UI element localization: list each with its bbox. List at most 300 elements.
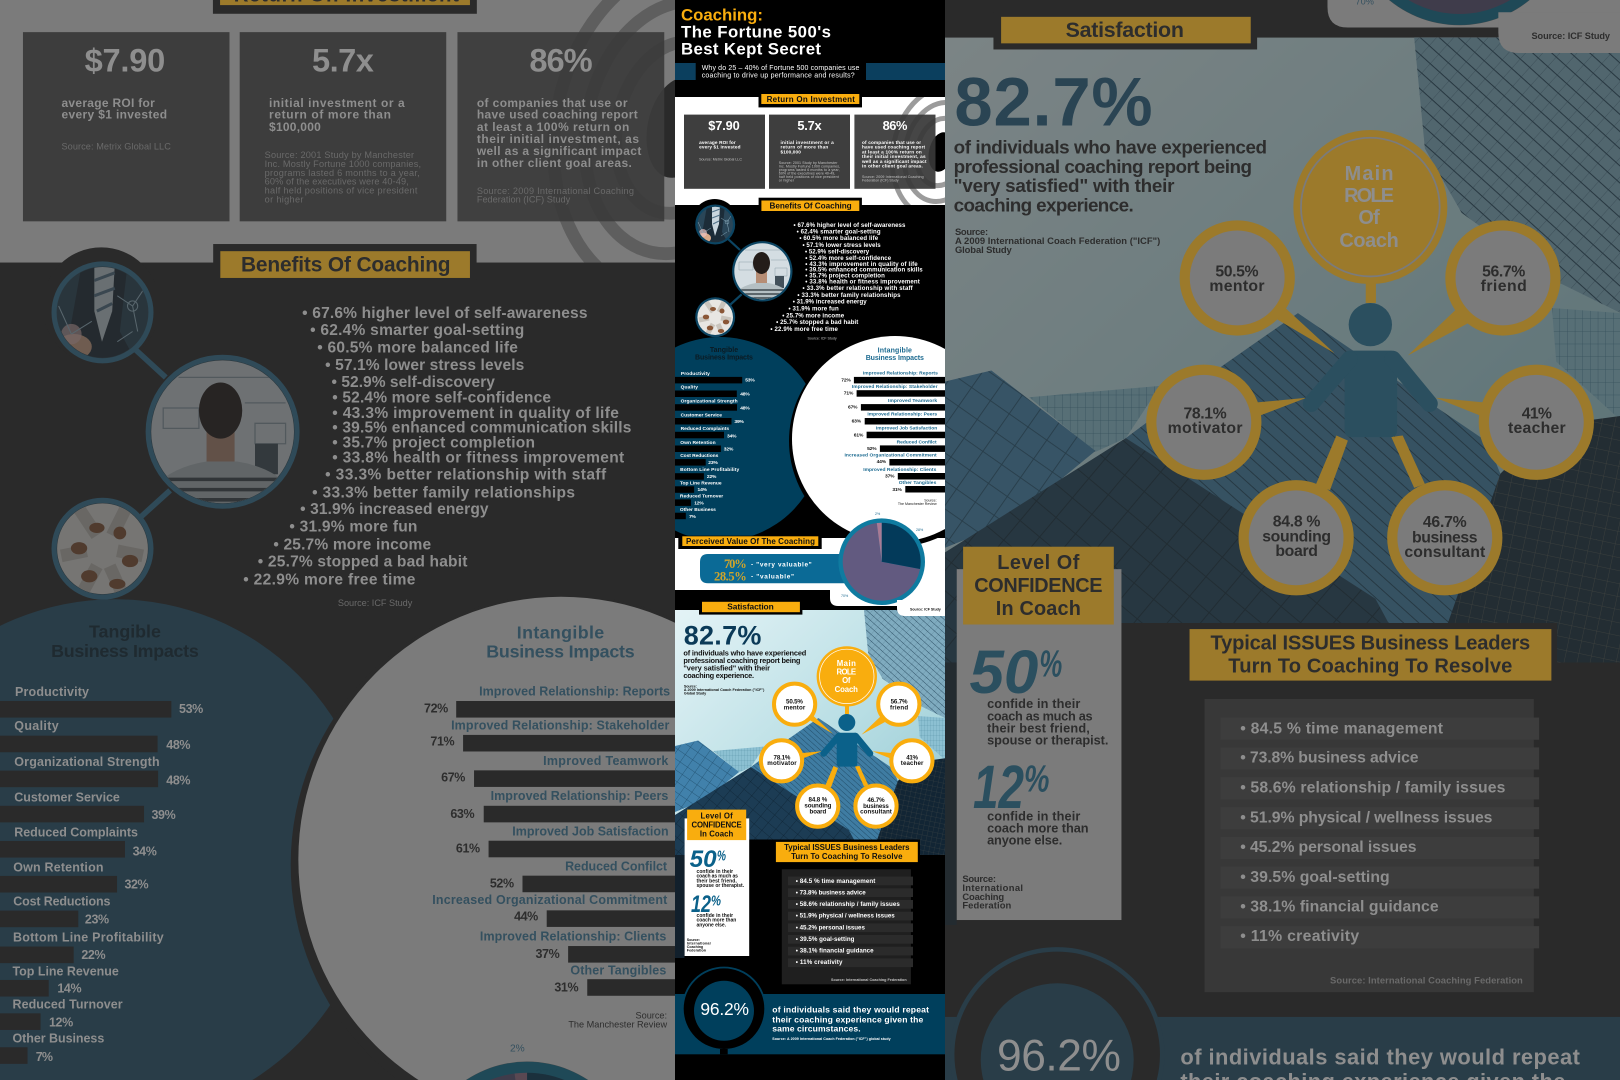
heading: Return On Investment bbox=[758, 94, 862, 107]
stat: 82.7% very satisfied: coaching experience. bbox=[683, 671, 754, 680]
panel: typical issues list: • 58.6% relationship / family issues bbox=[796, 901, 900, 908]
panel: intangible business impacts chart: Business Impacts bbox=[866, 355, 924, 362]
panel: intangible business impacts chart: 61% bbox=[456, 841, 480, 855]
banner: 96.2% would repeat bbox=[675, 968, 945, 1054]
panel: typical issues list: • 39.5% goal-setting bbox=[1240, 869, 1390, 886]
panel: intangible business impacts chart: Improved Relationship: Clients bbox=[480, 930, 666, 944]
panel: intangible business impacts chart: Other Tangibles bbox=[899, 480, 937, 486]
card: 5.7x investment: or higher bbox=[779, 178, 795, 182]
card: 86% of companies: 86% bbox=[529, 41, 593, 78]
list: coaching benefits: • 33.8% health or fitness improvement bbox=[805, 278, 920, 285]
panel: level of confidence in coach: % bbox=[1024, 757, 1050, 800]
panel: typical issues list: • 73.8% business advice bbox=[796, 889, 866, 896]
list: coaching benefits: • 31.9% increased energy bbox=[300, 501, 489, 518]
panel: tangible business impacts chart: Organizational Strength bbox=[681, 398, 738, 404]
panel: tangible business impacts chart: Customer Service bbox=[681, 412, 722, 418]
card: 5.7x investment: 5.7x bbox=[797, 118, 823, 133]
panel: tangible business impacts chart: 22% bbox=[81, 948, 106, 962]
card: $7.90 ROI: $7.90 bbox=[708, 118, 740, 133]
panel: left zoomed and dimmed view (ROI, benefits, business impacts) bbox=[0, 0, 675, 1080]
panel: level of confidence in coach: coach more than bbox=[987, 820, 1089, 835]
callout: valuable percentages: 28.5% bbox=[714, 569, 747, 583]
panel: intangible business impacts chart: 72% bbox=[424, 702, 448, 716]
panel: tangible business impacts chart: Productivity bbox=[681, 371, 710, 377]
panel: level of confidence in coach: CONFIDENCE bbox=[691, 820, 742, 829]
diagram: main role of coach: friend bbox=[890, 704, 908, 711]
list: coaching benefits: • 31.9% more fun bbox=[788, 305, 839, 312]
banner: 96.2% would repeat: their coaching experience given the bbox=[772, 1014, 924, 1024]
card: 86% of companies: have used coaching report bbox=[862, 144, 926, 150]
stat: 82.7% very satisfied: A 2009 International Coach Federation ("ICF") bbox=[955, 235, 1160, 246]
panel: intangible business impacts chart: 72% bbox=[841, 378, 851, 384]
panel: tangible business impacts chart: 23% bbox=[708, 460, 718, 466]
card: $7.90 ROI: every $1 invested bbox=[699, 144, 741, 150]
diagram: main role of coach: motivator bbox=[767, 760, 797, 767]
list: coaching benefits: Source: ICF Study bbox=[338, 598, 413, 608]
panel: intangible business impacts chart: Other Tangibles bbox=[570, 963, 666, 977]
list: coaching benefits: • 25.7% more income bbox=[273, 536, 432, 553]
panel: center full infographic bbox=[675, 6, 945, 1054]
heading: Benefits Of Coaching: Benefits Of Coaching bbox=[770, 201, 852, 210]
panel: typical issues list: • 11% creativity bbox=[1240, 928, 1359, 945]
chart: pie bottom bbox=[1349, 0, 1570, 25]
diagram: main role of coach: 50.5% bbox=[1215, 263, 1259, 280]
panel: level of confidence in coach: their best friend, bbox=[987, 720, 1090, 735]
list: coaching benefits: • 33.3% better relationship with staff bbox=[802, 285, 914, 292]
diagram: main role of coach bbox=[1151, 130, 1589, 590]
panel: intangible business impacts chart: Improved Relationship: Peers bbox=[491, 789, 668, 803]
diagram: main role of coach: ROLE bbox=[1344, 185, 1394, 207]
card: 5.7x investment: or higher bbox=[265, 194, 303, 204]
panel: level of confidence in coach: anyone else. bbox=[696, 922, 727, 928]
card: 5.7x investment: Source: 2001 Study by Manchester bbox=[779, 161, 838, 165]
panel: tangible business impacts chart: 22% bbox=[707, 474, 717, 480]
stat: 82.7% very satisfied: coaching experience. bbox=[954, 195, 1134, 216]
card: 86% of companies: well as a significant impact bbox=[476, 144, 641, 158]
list: coaching benefits: • 31.9% increased energy bbox=[793, 299, 867, 306]
panel: intangible business impacts chart: 37% bbox=[535, 947, 560, 961]
diagram: main role of coach: business bbox=[863, 803, 889, 810]
diagram: main role of coach: mentor bbox=[784, 704, 806, 711]
stat: 82.7% very satisfied bbox=[683, 620, 807, 696]
list: coaching benefits: • 67.6% higher level of self-awareness bbox=[794, 222, 906, 229]
panel: typical issues list: Source: International Coaching Federation bbox=[831, 978, 907, 982]
callout: valuable percentages bbox=[700, 554, 845, 583]
panel: typical issues list: Source: International Coaching Federation bbox=[1330, 975, 1523, 986]
panel: tangible business impacts chart: 7% bbox=[36, 1050, 53, 1064]
panel: intangible business impacts chart: Reduced Confilct bbox=[565, 859, 667, 873]
panel: tangible business impacts chart: Other Business bbox=[12, 1031, 104, 1045]
diagram: main role of coach: Of bbox=[1358, 207, 1380, 229]
panel: intangible business impacts chart: Improved Relationship: Stakeholder bbox=[451, 718, 670, 732]
card: 86% of companies: Source: 2009 International Coaching bbox=[862, 175, 924, 179]
diagram: main role of coach: sounding bbox=[804, 803, 832, 810]
card: 86% of companies: Source: 2009 International Coaching bbox=[477, 186, 634, 196]
panel: typical issues list: • 38.1% financial guidance bbox=[796, 948, 874, 955]
stat: 82.7% very satisfied: Source: bbox=[684, 684, 697, 688]
card: 86% of companies bbox=[457, 32, 664, 221]
panel: intangible business impacts chart: Business Impacts bbox=[486, 641, 635, 661]
diagram: main role of coach: 46.7% bbox=[867, 797, 885, 804]
diagram: main role of coach: Main bbox=[837, 659, 856, 668]
panel: intangible business impacts chart: Improved Relationship: Reports bbox=[863, 371, 938, 377]
panel: intangible business impacts chart: Improved Job Satisfaction bbox=[512, 824, 669, 838]
panel: level of confidence in coach: Source: bbox=[687, 938, 700, 942]
panel: tangible business impacts chart: Bottom Line Profitability bbox=[680, 467, 739, 473]
list: coaching benefits: • 39.5% enhanced communication skills bbox=[332, 419, 632, 436]
banner: 96.2% would repeat bbox=[932, 949, 1620, 1080]
stat: 82.7% very satisfied bbox=[954, 64, 1267, 255]
card: $7.90 ROI: Source: Metrix Global LLC bbox=[699, 158, 742, 162]
diagram: main role of coach: mentor bbox=[1209, 278, 1265, 295]
diagram: main role of coach: consultant bbox=[1404, 544, 1486, 561]
panel: tangible business impacts chart: Business Impacts bbox=[695, 355, 753, 362]
card: 5.7x investment: 5.7x bbox=[312, 41, 374, 78]
list: coaching benefits: • 52.9% self-discovery bbox=[805, 249, 870, 256]
heading: typical issues: Turn To Coaching To Resolve bbox=[791, 852, 903, 861]
panel: tangible business impacts chart: Own Retention bbox=[13, 861, 104, 875]
card: 86% of companies: well as a significant impact bbox=[861, 159, 927, 164]
panel: level of confidence in coach: International bbox=[962, 882, 1023, 893]
panel: tangible business impacts chart: Reduced Complaints bbox=[14, 825, 138, 839]
banner: 96.2% would repeat: of individuals said they would repeat bbox=[772, 1005, 929, 1015]
panel: level of confidence in coach: 12 bbox=[691, 891, 711, 918]
subtitle band bbox=[675, 63, 945, 80]
panel: intangible business impacts chart: 63% bbox=[852, 419, 862, 425]
panel: level of confidence in coach: Source: bbox=[962, 873, 996, 884]
heading: Satisfaction: Satisfaction bbox=[727, 602, 774, 612]
diagram: main role of coach: 46.7% bbox=[1423, 514, 1467, 531]
panel: intangible business impacts chart: 31% bbox=[554, 980, 579, 994]
panel: tangible business impacts chart: 39% bbox=[734, 419, 745, 425]
panel: intangible business impacts chart: Improved Relationship: Reports bbox=[479, 684, 670, 698]
card: 86% of companies: in other client goal areas. bbox=[477, 156, 632, 170]
panel: level of confidence in coach: 12 bbox=[973, 753, 1024, 821]
card: 5.7x investment bbox=[240, 32, 446, 221]
banner: 96.2% would repeat: Source: A 2009 International Coach Federation ("ICF") global study bbox=[772, 1037, 891, 1041]
panel: level of confidence in coach: In Coach bbox=[700, 829, 734, 838]
card: 5.7x investment: half held positions of vice president bbox=[265, 185, 418, 195]
card: 5.7x investment: Inc. Mostly Fortune 1000 companies, bbox=[779, 164, 840, 168]
panel: level of confidence in coach: CONFIDENCE bbox=[974, 575, 1102, 597]
panel: tangible business impacts chart: Other Business bbox=[680, 507, 716, 513]
diagram: main role of coach: sounding bbox=[1262, 529, 1331, 546]
stat: 82.7% very satisfied: Global Study bbox=[684, 692, 707, 696]
panel: tangible business impacts chart: Tangible bbox=[710, 347, 738, 354]
panel: intangible business impacts chart: 63% bbox=[450, 807, 475, 821]
panel: intangible business impacts chart: 37% bbox=[885, 474, 895, 480]
panel: tangible business impacts chart: Organizational Strength bbox=[14, 755, 160, 769]
panel: tangible business impacts chart: 14% bbox=[698, 487, 708, 493]
list: coaching benefits: • 60.5% more balanced life bbox=[799, 235, 879, 242]
list: coaching benefits bbox=[243, 305, 632, 608]
subtitle band: Why do 25 – 40% of Fortune 500 companies use bbox=[702, 65, 859, 72]
panel: tangible business impacts chart: Business Impacts bbox=[51, 641, 199, 661]
stat: 82.7% very satisfied: "very satisfied" with their bbox=[683, 664, 770, 672]
panel: intangible business impacts chart: The Manchester Review bbox=[568, 1019, 667, 1029]
card: 5.7x investment: initial investment or a bbox=[269, 96, 405, 110]
heading: typical issues: Typical ISSUES Business Leaders bbox=[784, 843, 910, 852]
panel: level of confidence in coach: 50 bbox=[690, 846, 717, 873]
card: 5.7x investment: 60% of the executives were 40-49, bbox=[265, 177, 409, 187]
list: coaching benefits: • 33.3% better family relationships bbox=[797, 292, 901, 299]
list: coaching benefits: • 25.7% stopped a bad habit bbox=[258, 554, 467, 571]
panel: intangible business impacts chart: Intangible bbox=[517, 622, 604, 642]
banner: 96.2% would repeat: 96.2% bbox=[997, 1031, 1121, 1080]
chart: perceived value pie: 2% bbox=[875, 512, 881, 516]
panel: intangible business impacts chart: 31% bbox=[892, 487, 903, 493]
panel: tangible business impacts chart: Bottom Line Profitability bbox=[13, 930, 164, 944]
chart: pie top: 2% bbox=[510, 1043, 525, 1054]
card: 86% of companies: at least a 100% return on bbox=[477, 120, 629, 134]
diagram: main role of coach: friend bbox=[1481, 278, 1527, 295]
panel: level of confidence in coach: confide in their bbox=[987, 808, 1080, 823]
panel: typical issues list: • 39.5% goal-setting bbox=[796, 936, 855, 943]
heading: Satisfaction: Satisfaction bbox=[1066, 18, 1184, 42]
panel: intangible business impacts chart: Improved Teamwork bbox=[543, 754, 668, 768]
stat: 82.7% very satisfied: "very satisfied" with their bbox=[954, 175, 1175, 196]
panel: tangible business impacts chart: Reduced Turnover bbox=[12, 997, 123, 1011]
source tab: ICF study: Source: ICF Study bbox=[1531, 31, 1611, 41]
panel: intangible business impacts chart: Intangible bbox=[878, 347, 912, 354]
panel: tangible business impacts chart: 32% bbox=[124, 878, 149, 892]
card: 5.7x investment: return of more than bbox=[780, 144, 828, 150]
panel: intangible business impacts chart: 44% bbox=[877, 459, 887, 465]
panel: intangible business impacts chart: 52% bbox=[490, 876, 514, 890]
panel: typical issues list: • 51.9% physical / wellness issues bbox=[796, 913, 895, 920]
panel: tangible business impacts chart: 53% bbox=[745, 378, 755, 384]
panel: tangible business impacts chart: 14% bbox=[57, 981, 82, 995]
diagram: main role of coach: Main bbox=[1345, 163, 1394, 185]
list: coaching benefits: • 33.8% health or fitness improvement bbox=[332, 449, 624, 466]
panel: level of confidence in coach: % bbox=[717, 848, 726, 864]
panel: level of confidence in coach: Federation bbox=[962, 899, 1012, 910]
panel: intangible business impacts chart: Improved Teamwork bbox=[888, 398, 937, 404]
panel: level of confidence in coach: confide in their bbox=[696, 869, 733, 875]
card: 86% of companies: Federation (ICF) Study bbox=[477, 194, 571, 204]
list: coaching benefits: • 25.7% more income bbox=[782, 312, 845, 319]
stat: 82.7% very satisfied: 82.7% bbox=[954, 64, 1153, 141]
panel: tangible business impacts chart: Quality bbox=[14, 719, 59, 733]
card: 5.7x investment: programs lasted 6 months to a year, bbox=[265, 168, 420, 178]
diagram: main role of coach: teacher bbox=[1508, 420, 1566, 437]
panel: tangible business impacts chart: 48% bbox=[166, 738, 190, 752]
card: 5.7x investment: initial investment or a bbox=[780, 140, 834, 145]
source tab: ICF study: Source: ICF Study bbox=[910, 608, 941, 612]
card: 86% of companies: their initial investment, as bbox=[477, 132, 639, 146]
panel: tangible business impacts chart: 12% bbox=[49, 1015, 73, 1029]
panel: typical issues list: • 84.5 % time management bbox=[1240, 720, 1444, 737]
list: coaching benefits: • 22.9% more free time bbox=[770, 326, 839, 333]
diagram: main role of coach: teacher bbox=[901, 760, 924, 767]
callout: valuable percentages: - "very valuable" bbox=[751, 562, 812, 569]
panel: tangible business impacts chart: 53% bbox=[179, 702, 203, 716]
diagram: main role of coach: Of bbox=[842, 676, 851, 685]
heading: typical issues: Typical ISSUES Business Leaders bbox=[1210, 633, 1530, 655]
card: $7.90 ROI bbox=[23, 32, 229, 221]
panel: level of confidence in coach: coach as much as bbox=[696, 874, 738, 880]
panel: tangible business impacts chart: Cost Reductions bbox=[680, 453, 719, 459]
diagram: main role of coach: 78.1% bbox=[1184, 406, 1227, 423]
list: coaching benefits: • 62.4% smarter goal-setting bbox=[797, 228, 881, 235]
panel: level of confidence in coach: spouse or therapist. bbox=[696, 883, 745, 889]
card: 5.7x investment: $100,000 bbox=[780, 149, 801, 154]
panel: typical issues list bbox=[782, 869, 913, 984]
list: coaching benefits: • 52.4% more self-confidence bbox=[805, 255, 892, 262]
panel: tangible business impacts chart: Quality bbox=[681, 384, 698, 390]
diagram: main role of coach: 50.5% bbox=[786, 699, 803, 706]
panel: level of confidence in coach bbox=[957, 547, 1121, 920]
diagram: main role of coach: 84.8 % bbox=[1273, 514, 1320, 531]
panel: tangible business impacts chart: 23% bbox=[85, 913, 109, 927]
panel: intangible business impacts chart: Improved Job Satisfaction bbox=[876, 426, 937, 432]
panel: intangible business impacts chart: 71% bbox=[430, 735, 455, 749]
title: Coaching: bbox=[681, 6, 763, 25]
card: $7.90 ROI: average ROI for bbox=[61, 96, 155, 110]
diagram: main role of coach: board bbox=[1275, 543, 1318, 560]
panel: tangible business impacts chart: 48% bbox=[740, 392, 750, 398]
panel: typical issues list: • 51.9% physical / wellness issues bbox=[1240, 809, 1493, 826]
stat: 82.7% very satisfied: professional coaching report being bbox=[683, 656, 801, 665]
list: coaching benefits: • 62.4% smarter goal-setting bbox=[310, 322, 524, 339]
panel: intangible business impacts chart: Source: bbox=[636, 1011, 667, 1021]
diagram: main role of coach bbox=[761, 646, 932, 827]
panel: intangible business impacts chart: 67% bbox=[848, 404, 858, 410]
title: The Fortune 500's bbox=[681, 23, 831, 42]
list: coaching benefits: • 39.5% enhanced communication skills bbox=[805, 267, 923, 274]
card: 5.7x investment: Source: 2001 Study by Manchester bbox=[265, 150, 414, 160]
chart: perceived value pie bbox=[838, 512, 925, 605]
stat: 82.7% very satisfied: Global Study bbox=[955, 244, 1013, 255]
chart: perceived value pie: 28% bbox=[916, 528, 924, 532]
heading: typical issues bbox=[776, 842, 918, 862]
card: 5.7x investment: return of more than bbox=[269, 108, 391, 122]
card: 86% of companies: at least a 100% return on bbox=[862, 149, 922, 154]
panel: level of confidence in coach: spouse or therapist. bbox=[987, 733, 1108, 748]
list: coaching benefits: • 35.7% project completion bbox=[332, 434, 535, 451]
list: coaching benefits: • 31.9% more fun bbox=[289, 518, 417, 535]
panel: level of confidence in coach: confide in their bbox=[987, 696, 1080, 711]
card: 86% of companies bbox=[854, 115, 936, 189]
card: 86% of companies: of companies that use or bbox=[862, 140, 921, 145]
list: coaching benefits: Source: ICF Study bbox=[808, 337, 837, 341]
list: coaching benefits: • 33.3% better relationship with staff bbox=[325, 467, 607, 484]
panel: intangible business impacts chart: Increased Organizational Commitment bbox=[844, 453, 937, 459]
card: $7.90 ROI: Source: Metrix Global LLC bbox=[61, 141, 171, 151]
card: $7.90 ROI: every $1 invested bbox=[61, 108, 167, 122]
panel: intangible business impacts chart bbox=[789, 335, 1001, 547]
source tab: ICF study bbox=[1498, 12, 1620, 53]
banner: 96.2% would repeat: 96.2% bbox=[700, 999, 749, 1019]
panel: intangible business impacts chart: 44% bbox=[514, 909, 538, 923]
panel: tangible business impacts chart: 12% bbox=[694, 500, 704, 506]
diagram: main role of coach: 56.7% bbox=[891, 699, 908, 706]
panel: typical issues list: • 73.8% business advice bbox=[1240, 750, 1419, 767]
panel: intangible business impacts chart: 67% bbox=[441, 771, 465, 785]
heading: Benefits Of Coaching bbox=[759, 198, 862, 212]
heading: Satisfaction bbox=[993, 12, 1257, 49]
list: coaching benefits: • 43.3% improvement in quality of life bbox=[332, 405, 619, 422]
panel: typical issues list: • 11% creativity bbox=[796, 959, 843, 966]
heading: Benefits Of Coaching bbox=[213, 244, 477, 280]
panel: tangible business impacts chart: 48% bbox=[166, 773, 190, 787]
stat: 82.7% very satisfied: 82.7% bbox=[684, 620, 761, 650]
card: $7.90 ROI bbox=[684, 115, 765, 189]
list: coaching benefits: • 60.5% more balanced life bbox=[317, 339, 518, 356]
panel: tangible business impacts chart: 39% bbox=[151, 808, 176, 822]
panel: typical issues list bbox=[1205, 699, 1539, 992]
panel: level of confidence in coach: International bbox=[687, 942, 711, 946]
panel: right zoomed and dimmed view (satisfaction, confidence, issues) bbox=[945, 0, 1620, 1080]
heading: Satisfaction bbox=[699, 600, 802, 615]
list: coaching benefits: • 22.9% more free time bbox=[243, 571, 416, 588]
diagram: main role of coach: 84.8 % bbox=[809, 797, 828, 804]
card: 86% of companies: in other client goal areas. bbox=[862, 163, 923, 168]
chart: perceived value pie: 70% bbox=[841, 594, 849, 598]
diagram: main role of coach: 56.7% bbox=[1482, 263, 1525, 280]
icon: three linked photo circles bbox=[695, 204, 793, 338]
panel: intangible business impacts chart: 71% bbox=[844, 390, 854, 396]
panel: level of confidence in coach bbox=[685, 810, 749, 956]
card: 5.7x investment: Inc. Mostly Fortune 1000 companies, bbox=[265, 159, 421, 169]
panel: level of confidence in coach: Coaching bbox=[962, 891, 1004, 902]
card: 5.7x investment: programs lasted 6 months to a year, bbox=[779, 168, 840, 172]
diagram: main role of coach: Coach bbox=[835, 685, 858, 694]
diagram: main role of coach: 41% bbox=[906, 754, 918, 761]
panel: level of confidence in coach: Federation bbox=[687, 948, 707, 952]
panel: level of confidence in coach: coach as much as bbox=[987, 708, 1093, 723]
diagram: main role of coach: 78.1% bbox=[774, 754, 791, 761]
heading: Return On Investment: Return On Investment bbox=[767, 95, 855, 104]
panel: tangible business impacts chart bbox=[618, 337, 822, 541]
list: coaching benefits: • 57.1% lower stress levels bbox=[325, 357, 525, 374]
card: 86% of companies: of companies that use or bbox=[477, 96, 628, 110]
panel: level of confidence in coach: anyone else. bbox=[987, 833, 1062, 848]
stat: 82.7% very satisfied: of individuals who have experienced bbox=[683, 648, 807, 657]
panel: tangible business impacts chart: Productivity bbox=[15, 685, 89, 699]
diagram: main role of coach: board bbox=[810, 808, 826, 815]
panel: tangible business impacts chart: Top Line Revenue bbox=[680, 480, 722, 486]
diagram: main role of coach: Coach bbox=[1339, 230, 1399, 252]
list: coaching benefits bbox=[770, 222, 923, 341]
diagram: main role of coach: ROLE bbox=[836, 668, 856, 676]
panel: tangible business impacts chart: 34% bbox=[727, 433, 737, 439]
panel: intangible business impacts chart: Improved Relationship: Clients bbox=[863, 467, 937, 473]
diagram: main role of coach: consultant bbox=[860, 809, 892, 816]
panel: typical issues list: • 45.2% personal issues bbox=[796, 924, 865, 931]
panel: intangible business impacts chart: 52% bbox=[867, 446, 877, 452]
diagram: main role of coach: 41% bbox=[1522, 406, 1552, 423]
title bbox=[681, 6, 831, 58]
icon: three linked photo circles bbox=[51, 260, 301, 602]
panel: tangible business impacts chart: 34% bbox=[133, 844, 157, 858]
list: coaching benefits: • 25.7% stopped a bad habit bbox=[776, 319, 858, 326]
card: 5.7x investment: $100,000 bbox=[269, 120, 321, 134]
card: $7.90 ROI: average ROI for bbox=[699, 140, 736, 145]
list: coaching benefits: • 43.3% improvement in quality of life bbox=[805, 261, 918, 268]
panel: level of confidence in coach: In Coach bbox=[996, 598, 1081, 620]
panel: typical issues list: • 84.5 % time management bbox=[796, 878, 875, 885]
panel: intangible business impacts chart: 61% bbox=[854, 432, 864, 438]
panel: tangible business impacts chart: Customer Service bbox=[14, 790, 120, 804]
list: coaching benefits: • 33.3% better family relationships bbox=[312, 485, 575, 502]
panel: intangible business impacts chart: Increased Organizational Commitment bbox=[432, 893, 667, 907]
heading: Return On Investment bbox=[213, 0, 477, 14]
list: coaching benefits: • 67.6% higher level of self-awareness bbox=[302, 305, 588, 322]
panel: intangible business impacts chart: Source: bbox=[924, 498, 937, 502]
diagram: main role of coach: motivator bbox=[1168, 420, 1243, 437]
panel: intangible business impacts chart bbox=[291, 594, 831, 1080]
